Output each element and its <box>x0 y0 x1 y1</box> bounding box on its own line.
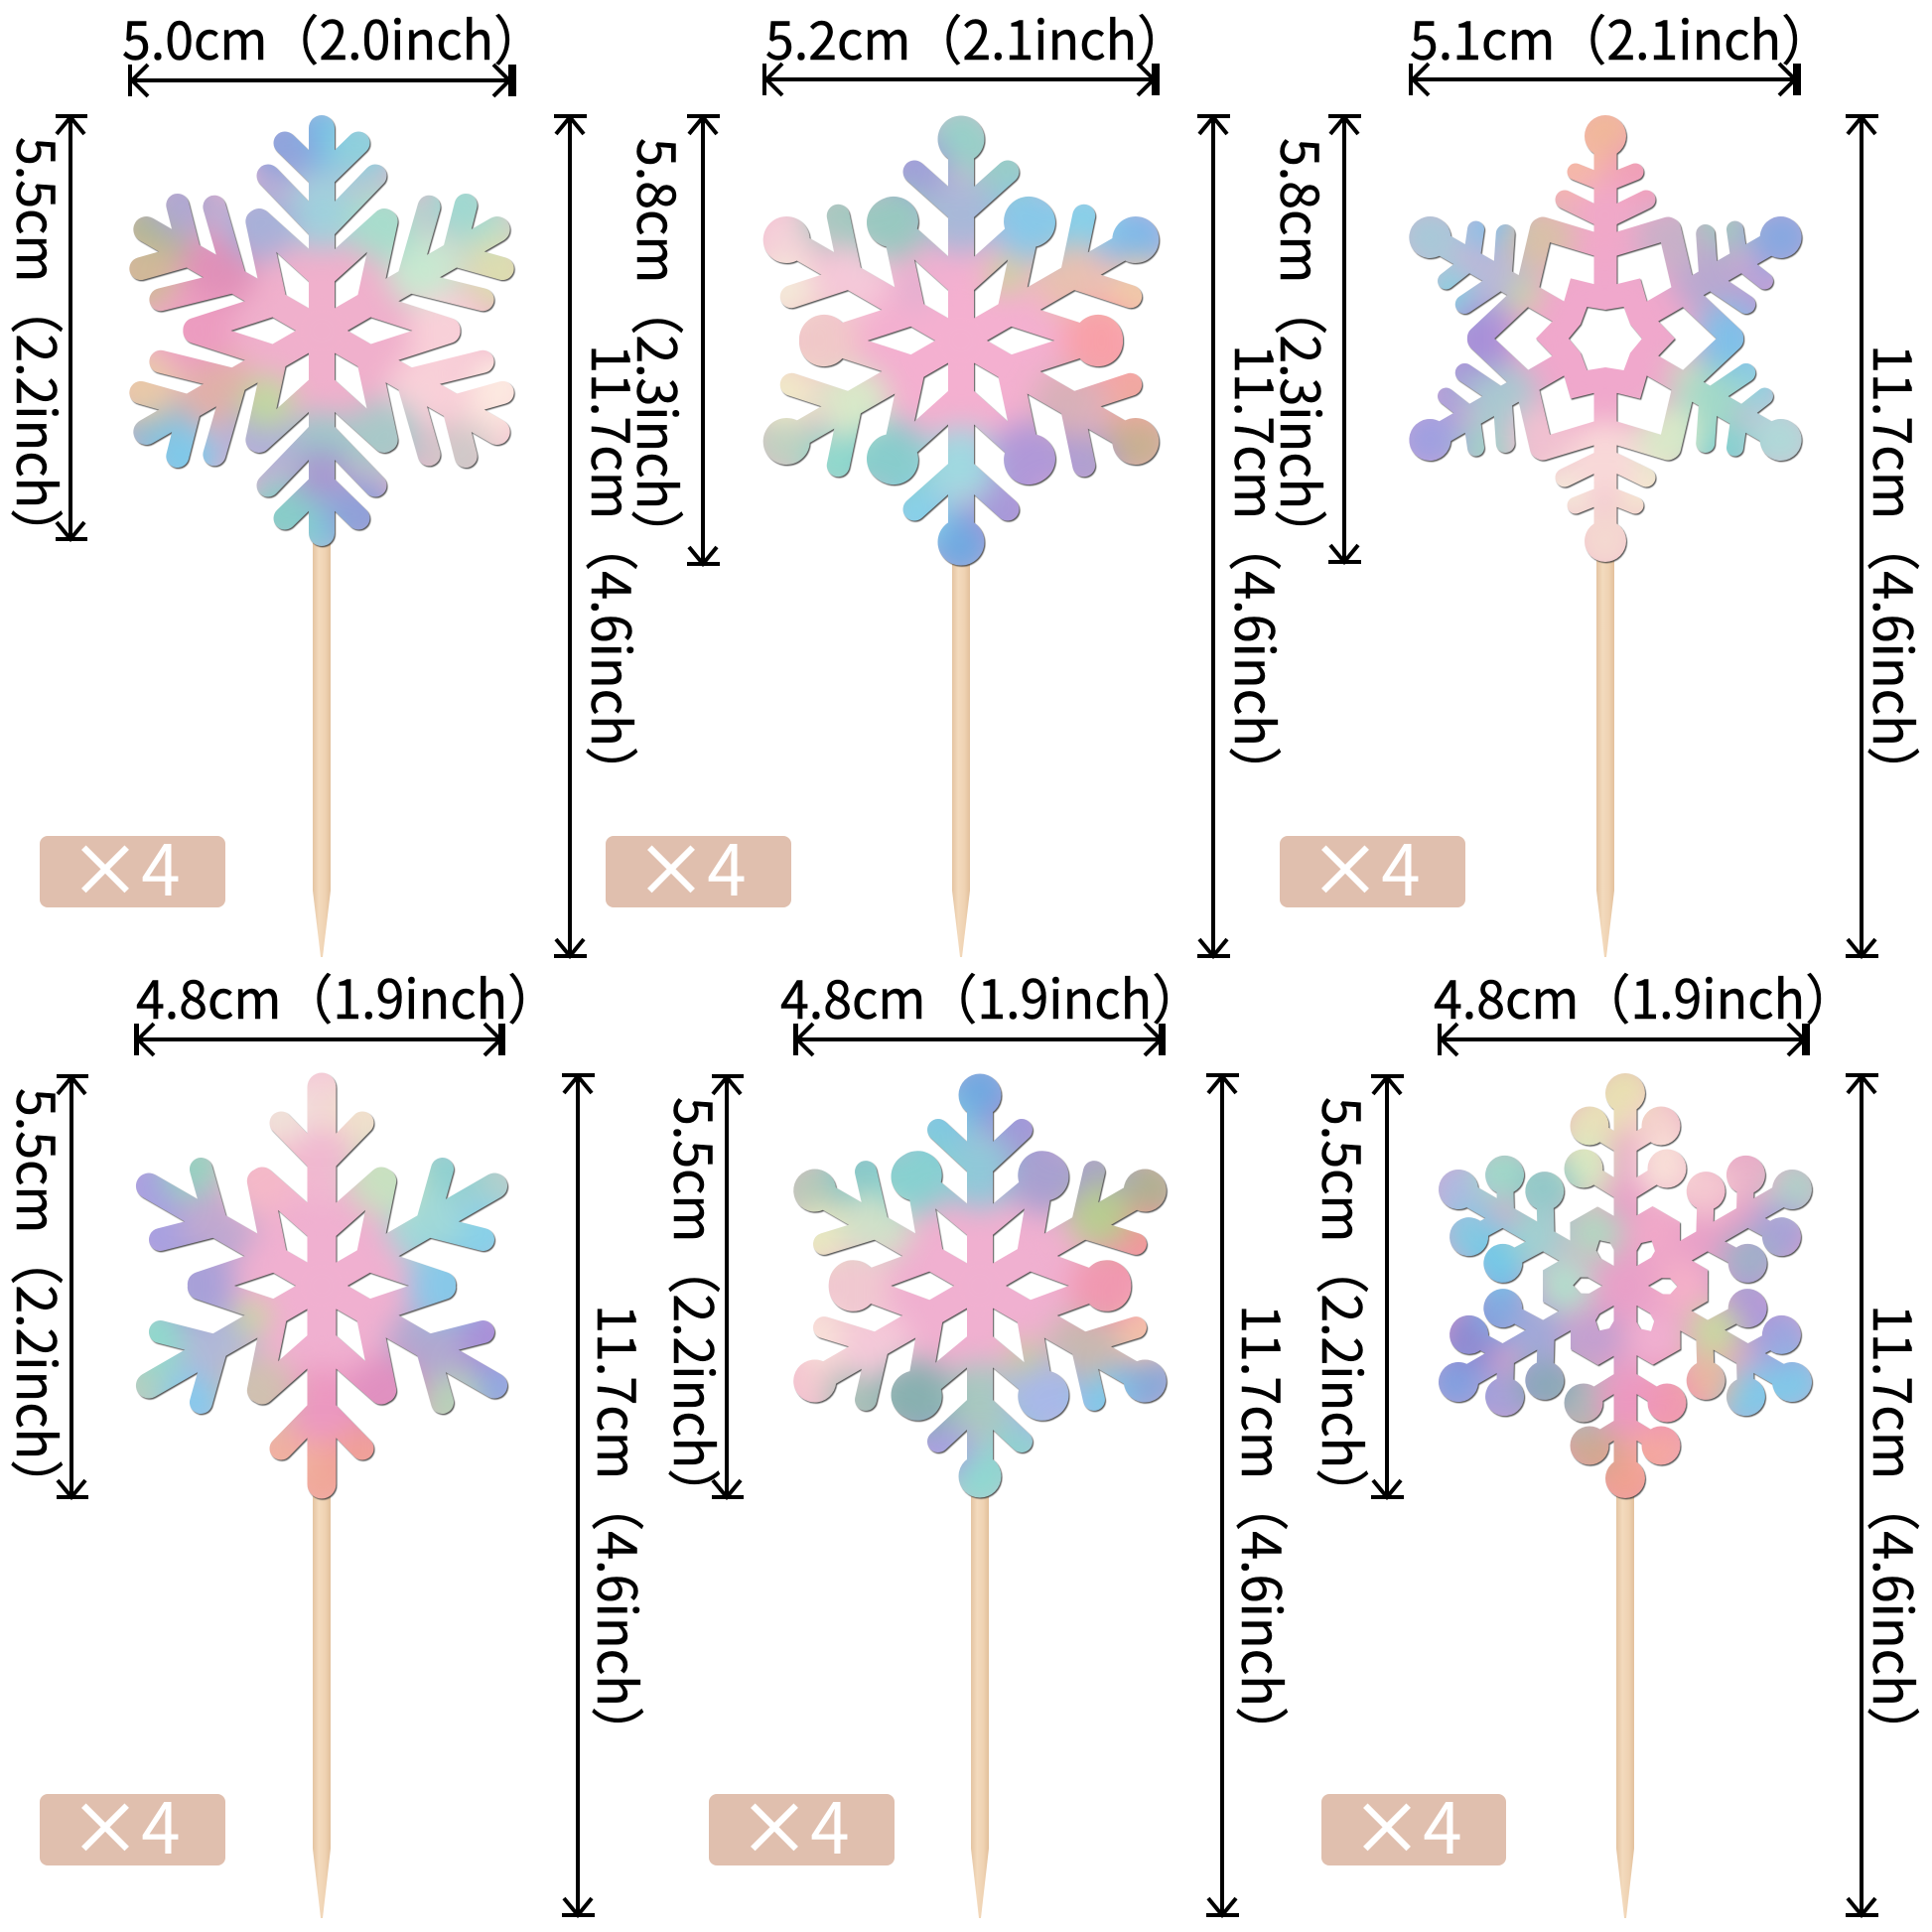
height label 5: 5.5cm（2.2inch） <box>658 1097 737 1520</box>
snowflake 6 <box>1439 1073 1814 1500</box>
height label 4: 5.5cm（2.2inch） <box>1 1088 79 1511</box>
quantity badge 6: × <box>1351 1773 1423 1874</box>
height arrow 1 <box>56 116 87 539</box>
quantity badge 6 <box>1321 1773 1506 1874</box>
total height label 5: 11.7cm（4.6inch） <box>1226 1305 1305 1758</box>
toothpick stick 4 <box>313 1484 331 1918</box>
snowflake 1 <box>129 115 516 548</box>
total height arrow 1 <box>554 116 587 956</box>
snowflake 2 <box>762 115 1161 568</box>
height arrow 6 <box>1371 1076 1404 1497</box>
toothpick stick 1 <box>313 526 331 957</box>
width arrow 3 <box>1409 64 1801 95</box>
height label 2: 5.8cm（2.3inch） <box>621 138 700 561</box>
panel: snowflake topper 1 <box>1 0 654 957</box>
total height arrow 4 <box>562 1075 595 1915</box>
total height arrow 6 <box>1846 1075 1878 1915</box>
snowflake 3 <box>1409 115 1803 564</box>
total height label 1: 11.7cm（4.6inch） <box>576 345 654 798</box>
panel: snowflake topper 5 <box>658 956 1305 1918</box>
quantity badge 1 <box>40 815 225 916</box>
height arrow 3 <box>1328 116 1361 562</box>
toothpick stick 3 <box>1596 546 1614 957</box>
quantity badge 1: 4 <box>141 815 181 916</box>
total height label 2: 11.7cm（4.6inch） <box>1219 345 1298 798</box>
quantity badge 2: × <box>635 815 707 916</box>
quantity badge 2 <box>606 815 791 916</box>
width label 6: 4.8cm（1.9inch） <box>1434 956 1857 1035</box>
toothpick stick 6 <box>1616 1484 1634 1918</box>
height label 6: 5.5cm（2.2inch） <box>1307 1097 1385 1520</box>
quantity badge 2: 4 <box>707 815 747 916</box>
toothpick stick 2 <box>952 546 970 957</box>
width arrow 5 <box>793 1024 1166 1055</box>
quantity badge 1: × <box>69 815 141 916</box>
width label 5: 4.8cm（1.9inch） <box>780 956 1203 1035</box>
width arrow 1 <box>128 65 516 96</box>
quantity badge 6: 4 <box>1423 1773 1462 1874</box>
width arrow 4 <box>134 1024 505 1055</box>
quantity badge 4: × <box>69 1773 141 1874</box>
width label 4: 4.8cm（1.9inch） <box>136 956 559 1035</box>
quantity badge 5: × <box>739 1773 810 1874</box>
panel: snowflake topper 4 <box>1 956 660 1918</box>
height arrow 2 <box>687 116 720 564</box>
snowflake 5 <box>793 1074 1168 1499</box>
total height arrow 5 <box>1206 1075 1239 1915</box>
height arrow 5 <box>712 1076 744 1497</box>
width arrow 2 <box>762 64 1160 95</box>
snowflake 4 <box>135 1072 509 1501</box>
quantity badge 4: 4 <box>141 1773 181 1874</box>
total height label 4: 11.7cm（4.6inch） <box>582 1305 660 1758</box>
quantity badge 5: 4 <box>810 1773 850 1874</box>
panel: snowflake topper 6 <box>1307 956 1932 1918</box>
quantity badge 3 <box>1280 815 1465 916</box>
panel: snowflake topper 2 <box>606 0 1298 957</box>
height arrow 4 <box>57 1076 88 1497</box>
quantity badge 4 <box>40 1773 225 1874</box>
height label 3: 5.8cm（2.3inch） <box>1265 138 1343 561</box>
width arrow 6 <box>1438 1024 1810 1055</box>
toothpick stick 5 <box>971 1484 989 1918</box>
total height arrow 3 <box>1846 116 1878 956</box>
height label 1: 5.5cm（2.2inch） <box>1 137 79 560</box>
quantity badge 5 <box>709 1773 895 1874</box>
quantity badge 3: × <box>1310 815 1381 916</box>
total height arrow 2 <box>1197 116 1230 956</box>
panel: snowflake topper 3 <box>1265 0 1932 957</box>
quantity badge 3: 4 <box>1381 815 1421 916</box>
